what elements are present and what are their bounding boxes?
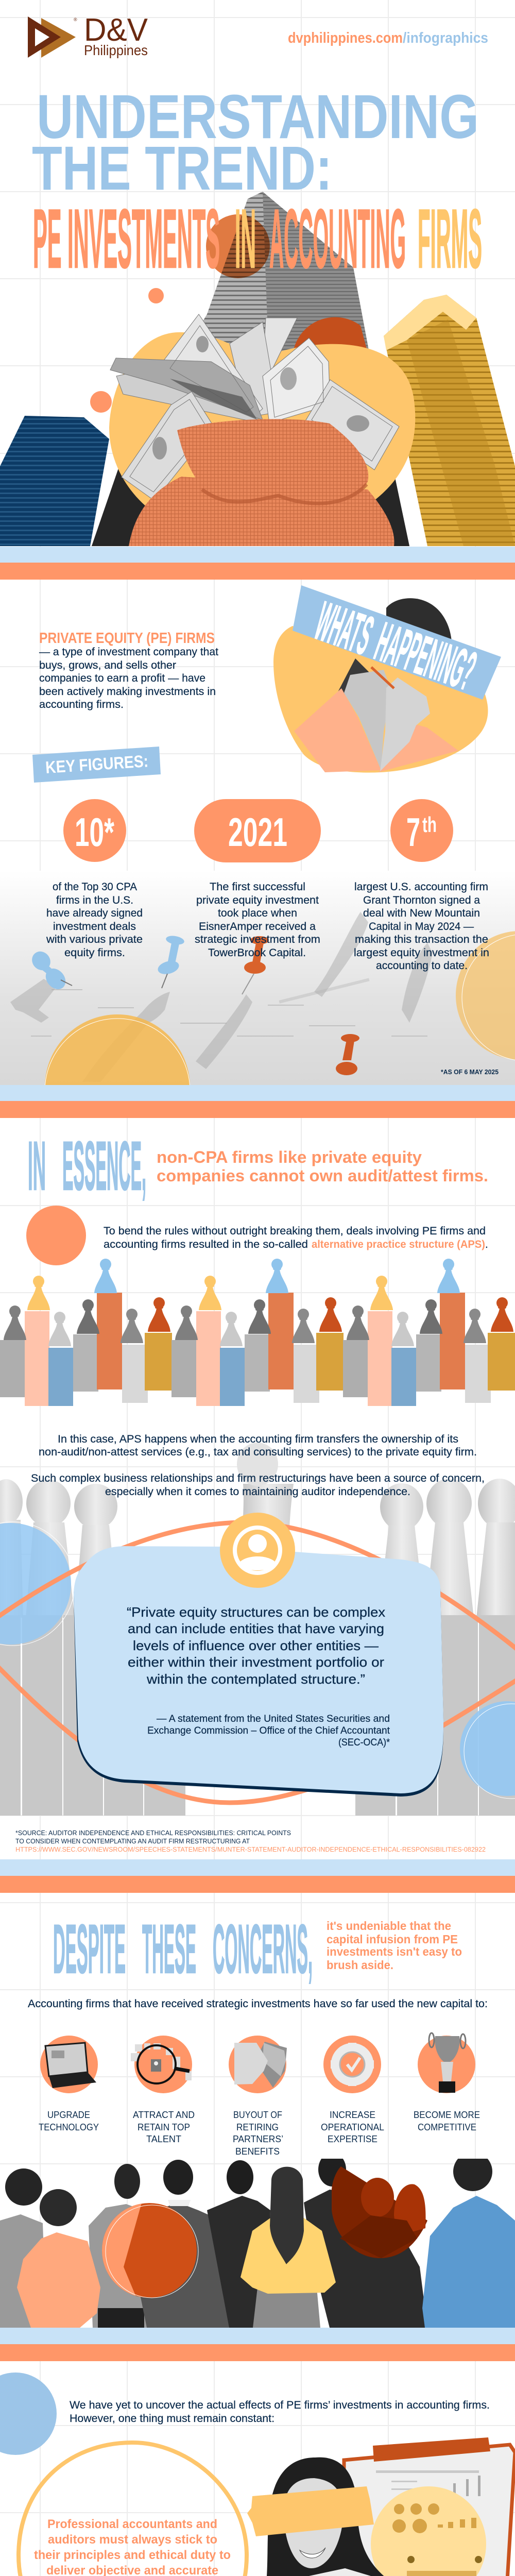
clipboard chart marks xyxy=(392,2503,482,2576)
figure 10*: investment deals xyxy=(53,921,136,933)
building: central gray tower xyxy=(92,192,411,547)
circle overlay: orange on men xyxy=(102,2203,197,2298)
person: dark suit man xyxy=(141,2160,229,2328)
text block: auditor independence concern: Such complex business relationships and firm restructurings have been a source of concern, xyxy=(31,1472,485,1484)
title xyxy=(32,81,482,285)
heading: in essence: IN xyxy=(28,1128,46,1205)
quote text: levels of influence over other entities — xyxy=(133,1638,379,1653)
text block: APS explanation: In this case, APS happens when the accounting firm transfers the ownership of its xyxy=(58,1433,458,1445)
use 3: buyout: PARTNERS’ xyxy=(233,2134,283,2144)
small dot xyxy=(148,288,164,303)
building: blue tower xyxy=(0,416,109,546)
building: gold tower xyxy=(384,295,515,546)
yellow blob behind bag xyxy=(109,332,415,513)
figure 7th xyxy=(354,799,489,972)
person: woman with yellow blouse xyxy=(241,2167,336,2328)
yellow bar over eyes xyxy=(247,2486,374,2536)
text block: yet to uncover xyxy=(70,2399,490,2425)
header url xyxy=(288,30,488,46)
use 4: operational expertise xyxy=(321,2036,384,2144)
figure 10* xyxy=(46,799,143,959)
heading: despite these concerns: investments isn't easy to xyxy=(327,1945,462,1958)
text block: bend the rules xyxy=(104,1225,488,1250)
heading: despite these concerns: it's undeniable that the xyxy=(327,1919,451,1933)
use 2: attract talent: ATTRACT AND xyxy=(133,2110,195,2120)
figure 2021: took place when xyxy=(218,907,297,919)
icon: laptop xyxy=(45,2043,96,2088)
use 3: buyout: BENEFITS xyxy=(235,2146,280,2157)
use 5: become more competitive xyxy=(414,2033,480,2132)
figure 7th: making this transaction the xyxy=(355,934,488,945)
text block: yet to uncover: We have yet to uncover the actual effects of PE firms’ investments in accounting firms. xyxy=(70,2399,490,2411)
text block: auditor independence concern xyxy=(31,1472,485,1498)
header url: /infographics xyxy=(403,30,488,46)
panel: woman with question banner xyxy=(273,585,501,773)
source note: *SOURCE: AUDITOR INDEPENDENCE AND ETHICAL RESPONSIBILITIES: CRITICAL POINTS xyxy=(15,1829,291,1837)
figure 10*: have already signed xyxy=(46,907,143,919)
text block: private equity definition: been actively making investments in xyxy=(39,686,216,698)
circle outline xyxy=(462,934,515,1061)
figure 2021: 2021 xyxy=(228,809,287,855)
use 3: buyout: BUYOUT OF xyxy=(233,2110,282,2120)
figure 7th: th xyxy=(422,812,437,837)
pin: orange 2 xyxy=(336,1034,359,1075)
attribution: — A statement from the United States Securities and xyxy=(157,1713,390,1724)
decorative circle on tower xyxy=(206,214,270,278)
use 2: attract talent: TALENT xyxy=(146,2134,181,2144)
figure 2021 xyxy=(194,799,321,959)
person: blue shirt man xyxy=(422,2152,515,2328)
text block: private equity definition: buys, grows, and sells other xyxy=(39,659,176,671)
heading: despite these concerns: brush aside. xyxy=(327,1958,393,1972)
decorative circle: dark orange xyxy=(294,317,367,348)
quote text: “Private equity structures can be complex xyxy=(127,1604,385,1620)
figure 7th: 7 xyxy=(406,809,420,855)
logo: D&V Philippines: Philippines xyxy=(84,42,148,58)
orange lens outline xyxy=(0,1522,515,1803)
figure 7th: Capital in May 2024 — xyxy=(369,921,474,933)
heading: in essence: companies cannot own audit/attest firms. xyxy=(157,1166,488,1185)
source note: HTTPS://WWW.SEC.GOV/NEWSROOM/SPEECHES-STATEMENTS/MUNTER-STATEMENT-AUDITOR-INDEPENDENCE-ETHICAL-RESPONSIBILITIES-082922 xyxy=(15,1845,486,1853)
icon: envelope with money xyxy=(234,2042,287,2088)
banner xyxy=(293,585,501,700)
circle: yellow left xyxy=(45,1014,190,1085)
text block: private equity definition: — a type of investment company that xyxy=(39,646,218,658)
map shadows xyxy=(10,912,433,1082)
source note xyxy=(15,1829,486,1853)
use 1: upgrade technology: TECHNOLOGY xyxy=(39,2122,99,2132)
people seen from behind illustration xyxy=(0,2152,515,2328)
decorative blue circle xyxy=(0,2372,57,2455)
person: dark jacket man xyxy=(207,2160,270,2328)
footnote: as of date: *AS OF 6 MAY 2025 xyxy=(441,1068,499,1076)
figure 7th: deal with New Mountain xyxy=(363,907,480,919)
source note: TO CONSIDER WHEN CONTEMPLATING AN AUDIT FIRM RESTRUCTURING AT xyxy=(15,1837,250,1845)
circle outline xyxy=(45,1018,190,1085)
pin: blue 1 xyxy=(32,951,72,989)
callout text: auditors must always stick to xyxy=(48,2533,217,2547)
heading: in essence: non-CPA firms like private equity xyxy=(157,1148,422,1166)
heading: despite these concerns: THESE xyxy=(142,1911,196,1988)
pin: orange 1 xyxy=(242,936,269,994)
office illustration xyxy=(247,2437,515,2576)
use 5: become more competitive: COMPETITIVE xyxy=(418,2122,476,2132)
use 1: upgrade technology: UPGRADE xyxy=(47,2110,90,2120)
money bag xyxy=(129,419,394,546)
callout text: their principles and ethical duty to xyxy=(34,2548,231,2562)
text block: bend the rules: accounting firms resulted in the so-called xyxy=(104,1239,308,1250)
attribution xyxy=(147,1713,390,1748)
figure 10*: 10* xyxy=(75,809,114,855)
figure 7th: Grant Thornton signed a xyxy=(363,894,480,906)
title: IN xyxy=(235,192,256,285)
icon: avatar badge xyxy=(220,1513,295,1588)
attribution: Exchange Commission – Office of the Chief Accountant xyxy=(147,1725,390,1736)
use 4: operational expertise: INCREASE xyxy=(330,2110,375,2120)
icon: gear with check xyxy=(331,2043,374,2086)
figure 2021: The first successful xyxy=(210,881,305,893)
use 4: operational expertise: OPERATIONAL xyxy=(321,2122,384,2132)
key figures banner: KEY FIGURES: xyxy=(45,751,149,777)
text block: bend the rules: alternative practice structure (APS) xyxy=(312,1239,485,1250)
figure 7th: largest equity investment in xyxy=(354,947,489,959)
figure 2021: EisnerAmper received a xyxy=(199,921,316,933)
figure 7th: largest U.S. accounting firm xyxy=(354,881,488,893)
person: woman with orange striped shirt xyxy=(17,2189,100,2328)
figure 10*: with various private xyxy=(46,934,143,945)
text block: yet to uncover: However, one thing must remain constant: xyxy=(70,2413,274,2425)
intro line to uses of capital: Accounting firms that have received strategic investments have so far used the new capital to: xyxy=(28,1998,488,2010)
use 4: operational expertise: EXPERTISE xyxy=(328,2134,377,2144)
logo: D&V Philippines: D&V xyxy=(84,12,148,48)
header url: dvphilippines.com xyxy=(288,30,403,46)
woman at desk xyxy=(149,2458,412,2576)
attribution: (SEC-OCA)* xyxy=(338,1737,390,1748)
callout text xyxy=(34,2517,231,2576)
figure 2021: private equity investment xyxy=(196,894,319,906)
pawns on blocks illustration xyxy=(0,1259,515,1406)
text block: bend the rules: To bend the rules without outright breaking them, deals involving PE firms and xyxy=(104,1225,486,1237)
figure 10*: of the Top 30 CPA xyxy=(53,881,137,893)
decorative outline circle left xyxy=(0,1522,75,1646)
use 2: attract talent: RETAIN TOP xyxy=(138,2122,190,2132)
clipboard xyxy=(344,2437,515,2576)
use 1: upgrade technology xyxy=(39,2036,99,2132)
circle outline xyxy=(106,2205,198,2298)
decorative orange circle xyxy=(26,1206,86,1265)
logo: D&V Philippines: ® xyxy=(74,17,77,22)
hero illustration: buildings and money bag xyxy=(0,192,515,547)
figure 10*: firms in the U.S. xyxy=(56,894,133,906)
key figures banner xyxy=(32,747,161,783)
woman figure xyxy=(294,598,458,772)
decorative blue circle right xyxy=(460,1701,515,1796)
yellow blob xyxy=(273,626,488,773)
callout text: Professional accountants and xyxy=(47,2517,217,2531)
speech ring xyxy=(19,2443,247,2576)
figure 10*: equity firms. xyxy=(64,947,125,959)
use 3: buyout: RETIRING xyxy=(236,2122,279,2132)
text block: APS explanation: non-audit/non-attest services (e.g., tax and consulting services) to the private equity firm. xyxy=(39,1446,477,1458)
heading: despite these concerns: capital infusion from PE xyxy=(327,1933,458,1946)
wooden figures behind quote xyxy=(0,1443,515,1816)
circle overlay: red with two figures xyxy=(332,2166,427,2258)
text block: auditor independence concern: especially when it comes to maintaining auditor independence. xyxy=(105,1486,410,1498)
figure 2021: TowerBrook Capital. xyxy=(208,947,306,959)
text block: APS explanation xyxy=(39,1433,477,1458)
use 5: become more competitive: BECOME MORE xyxy=(414,2110,480,2120)
icon: trophy xyxy=(429,2033,466,2093)
person: gray afro xyxy=(0,2168,46,2328)
small dot xyxy=(90,391,112,413)
text block: bend the rules: . xyxy=(485,1239,488,1250)
person: rightmost suit xyxy=(304,2153,427,2328)
decorative blue circle left xyxy=(0,1523,71,1645)
logo: D&V Philippines xyxy=(28,12,148,58)
text block: private equity definition: PRIVATE EQUITY (PE) FIRMS xyxy=(39,630,215,647)
text block: private equity definition: companies to earn a profit — have xyxy=(39,672,205,684)
map background with pins xyxy=(0,871,515,1085)
icon: magnifier xyxy=(131,2043,192,2083)
title: THE TREND: xyxy=(32,133,332,203)
text block: private equity definition xyxy=(39,630,218,710)
section divider bands xyxy=(0,547,515,2576)
figure 2021: strategic investment from xyxy=(195,934,320,945)
text block: private equity definition: accounting firms. xyxy=(39,699,124,710)
quote text: within the contemplated structure.” xyxy=(146,1671,365,1687)
money bills xyxy=(110,314,399,501)
use 3: buyout xyxy=(229,2036,287,2157)
circle: yellow right xyxy=(456,931,515,1060)
quote text: and can include entities that have varying xyxy=(128,1621,384,1636)
heading: despite these concerns: DESPITE xyxy=(53,1911,126,1988)
pin: blue 2 xyxy=(157,935,185,988)
person: gray shirt man xyxy=(89,2164,147,2328)
figure 7th: accounting to date. xyxy=(376,960,468,972)
use 2: attract talent xyxy=(131,2036,195,2144)
decorative outline circle right xyxy=(464,1704,515,1799)
quote text: either within their investment portfolio or xyxy=(128,1654,384,1670)
heading: in essence: ESSENCE, xyxy=(62,1128,146,1205)
quote card xyxy=(74,1546,443,1797)
quote text xyxy=(127,1604,385,1687)
circle overlay on clipboard xyxy=(371,2486,486,2576)
